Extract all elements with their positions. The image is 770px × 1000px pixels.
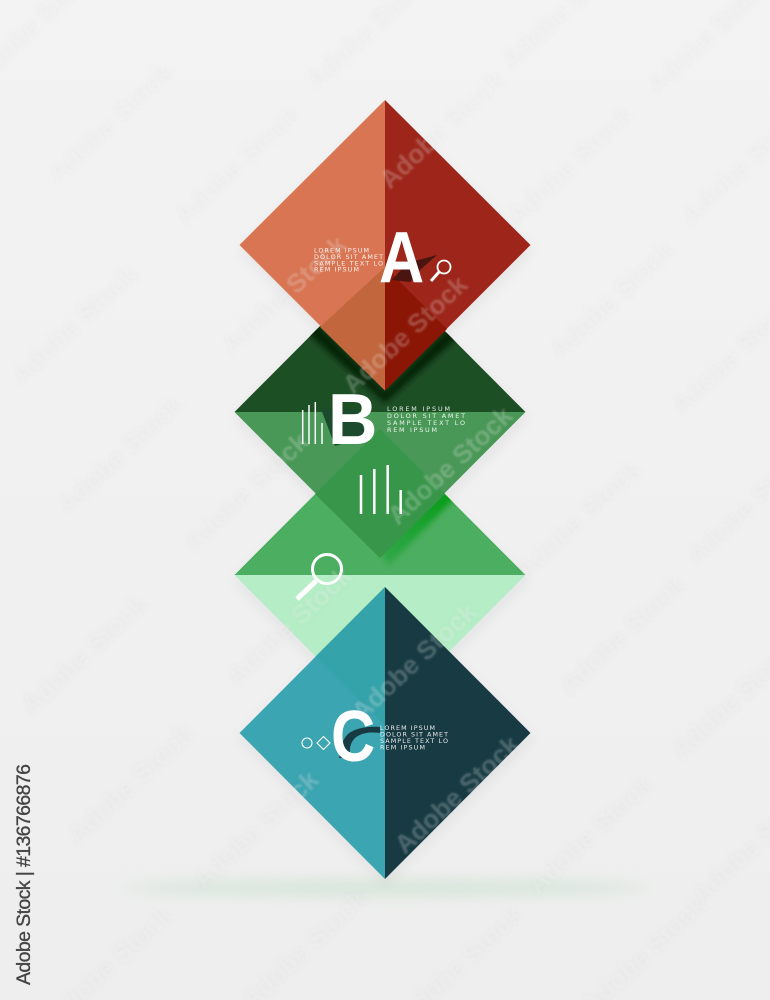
- ground shadow: [120, 879, 650, 897]
- side credit: Adobe Stock | #136766876: [13, 764, 35, 985]
- soft diamond shadows: [234, 106, 533, 885]
- icon: diamond: [317, 736, 330, 750]
- infographic canvas: [16, 100, 638, 986]
- watermarks: Adobe Stock: [346, 596, 483, 727]
- watermarks: Adobe Stock: [6, 259, 143, 390]
- watermarks: Adobe Stock: [502, 99, 639, 230]
- text block C: SAMPLE TEXT LO: [380, 737, 448, 745]
- text block A: [314, 246, 383, 274]
- text block C: DOLOR SIT AMET: [380, 730, 448, 738]
- watermarks: Adobe Stock: [382, 400, 519, 531]
- text block B: DOLOR SIT AMET: [387, 412, 465, 420]
- watermarks: Adobe Stock: [216, 229, 353, 360]
- icon: small magnifier: [431, 260, 450, 281]
- watermarks: Adobe Stock: [510, 454, 647, 585]
- watermarks: Adobe Stock: [544, 234, 681, 365]
- watermarks: Adobe Stock: [178, 426, 315, 557]
- panel: lower green diamond: [234, 494, 526, 656]
- watermarks: Adobe Stock: [16, 589, 153, 720]
- letter C: C: [331, 697, 375, 777]
- text block C: LOREM IPSUM: [380, 724, 435, 732]
- text block B: SAMPLE TEXT LO: [387, 419, 465, 427]
- watermarks: Adobe Stock: [42, 57, 179, 188]
- text block B: REM IPSUM: [387, 426, 437, 434]
- text block B: LOREM IPSUM: [387, 405, 450, 413]
- watermarks: Adobe Stock: [337, 269, 474, 400]
- text block C: [380, 724, 448, 752]
- icon: large bar chart: [361, 465, 401, 514]
- watermarks: Adobe Stock: [389, 729, 526, 860]
- shadow of A on B: [308, 326, 457, 404]
- overlap diamond: [315, 429, 445, 558]
- icon: circle: [302, 738, 312, 748]
- icon: small bar chart: [303, 402, 322, 444]
- watermarks: Adobe Stock: [522, 769, 659, 900]
- text block A: SAMPLE TEXT LO: [314, 260, 383, 268]
- letter C shadow: [339, 727, 380, 758]
- panel: C diamond: [240, 587, 530, 879]
- watermarks: Adobe Stock: [52, 389, 189, 520]
- watermarks: Adobe Stock: [554, 569, 691, 700]
- letter B with shadow: B: [328, 378, 377, 459]
- watermarks: Adobe Stock: [221, 560, 358, 691]
- panel: A diamond: [240, 100, 530, 390]
- watermarks: Adobe Stock: [62, 719, 199, 850]
- watermarks: Adobe Stock: [374, 64, 511, 195]
- text block C: REM IPSUM: [380, 744, 425, 752]
- text block B: [387, 405, 465, 434]
- text block A: DOLOR SIT AMET: [314, 253, 383, 261]
- letter A: A: [379, 218, 424, 298]
- shadow of B on lower green: [382, 494, 454, 566]
- watermarks: Adobe Stock: [169, 99, 306, 230]
- watermarks: Adobe Stock: [188, 764, 325, 895]
- panel: B diamond: [234, 326, 526, 558]
- text block A: LOREM IPSUM: [314, 246, 369, 254]
- text block A: REM IPSUM: [314, 266, 359, 274]
- icon: large magnifier: [297, 554, 342, 599]
- letter A shadow: [392, 255, 437, 282]
